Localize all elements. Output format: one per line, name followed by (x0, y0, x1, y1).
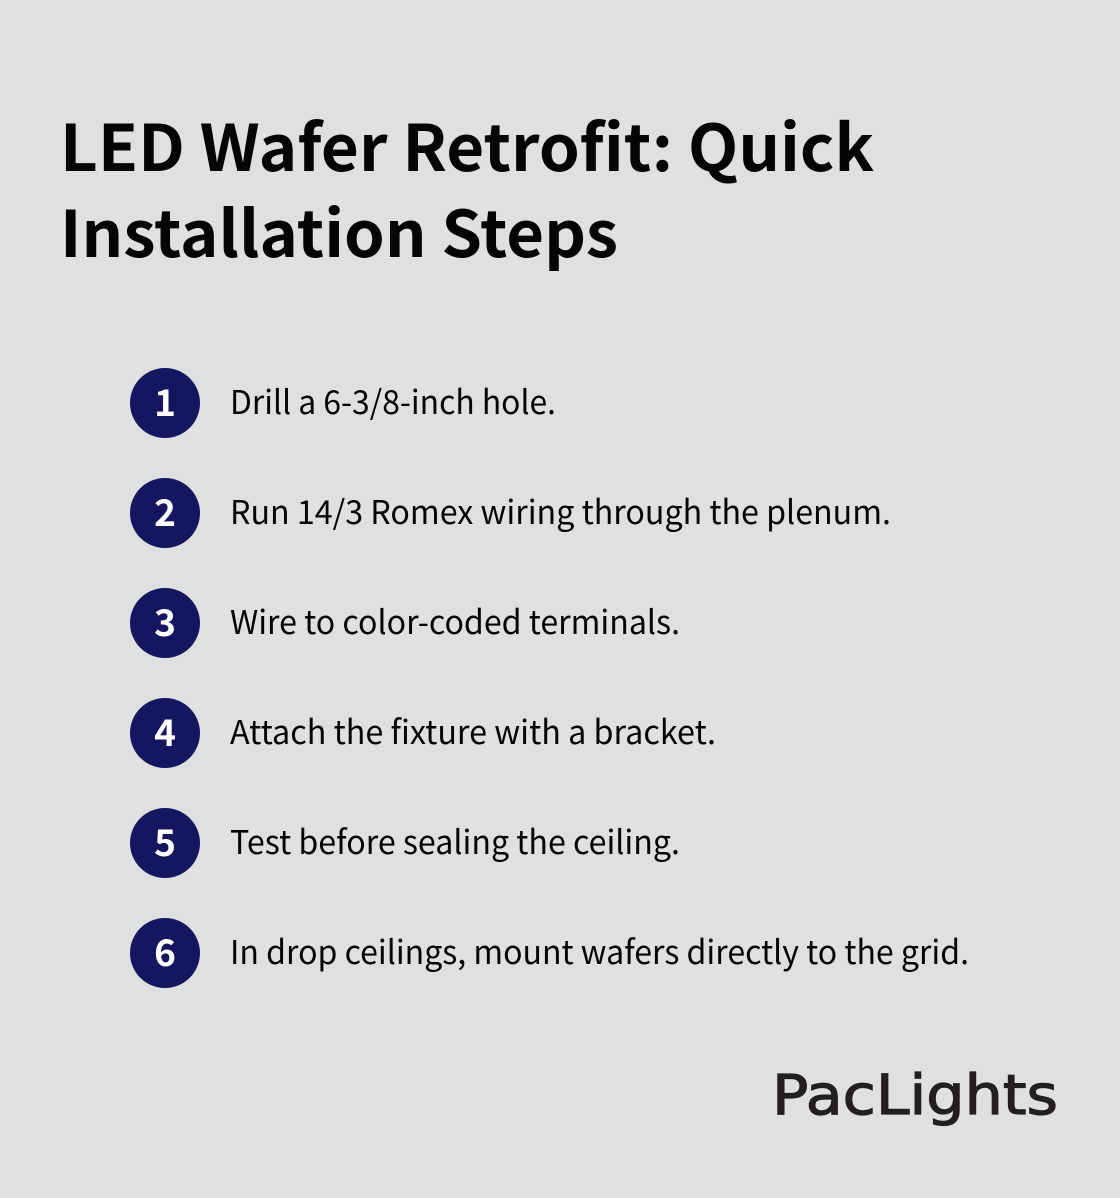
step 6: In drop ceilings, mount wafers directly to the grid. (230, 926, 969, 974)
step 1: Drill a 6-3/8-inch hole. (230, 376, 556, 424)
step 2 (130, 478, 891, 548)
title: Installation Steps (60, 184, 618, 276)
title: LED Wafer Retrofit: Quick (60, 98, 874, 190)
step 4 (130, 698, 716, 768)
step 4: 4 (154, 703, 176, 757)
step 4: Attach the fixture with a bracket. (230, 706, 716, 754)
step 1: 1 (154, 373, 176, 427)
step 5: Test before sealing the ceiling. (230, 816, 680, 864)
step 6 (130, 918, 969, 988)
step 5: 5 (154, 813, 176, 867)
step 3: Wire to color-coded terminals. (230, 596, 680, 644)
step 6: 6 (154, 923, 176, 977)
step 3: 3 (154, 593, 176, 647)
step 2: 2 (154, 483, 176, 537)
step 3 (130, 588, 680, 658)
step 1 (130, 368, 556, 438)
step 2: Run 14/3 Romex wiring through the plenum. (230, 486, 891, 534)
title (60, 98, 874, 276)
step 5 (130, 808, 680, 878)
logo: PacLights: PacLights (772, 1063, 1058, 1127)
